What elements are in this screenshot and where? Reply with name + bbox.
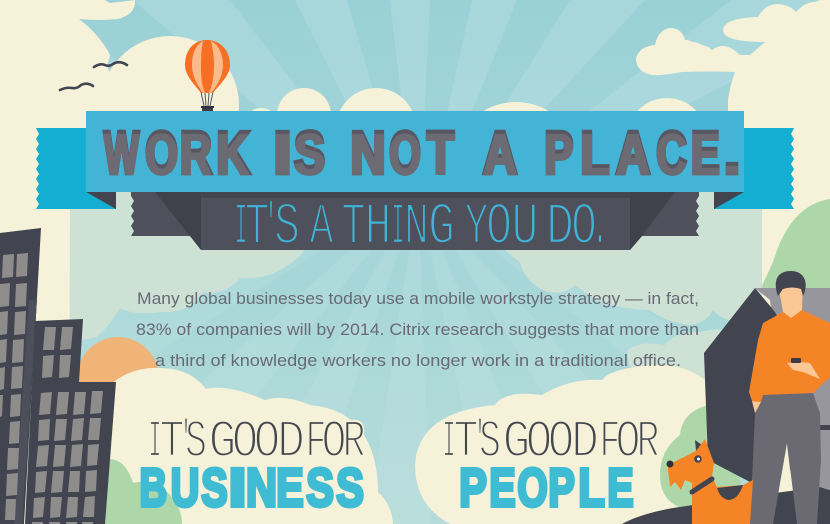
green bush left — [105, 459, 182, 524]
house — [704, 288, 830, 524]
subtitle: A — [310, 194, 334, 261]
subtitle: S — [274, 194, 300, 261]
good for people heading: G — [502, 412, 530, 472]
subtitle: O — [486, 194, 512, 261]
green bush top right — [760, 199, 830, 290]
main title: S — [294, 120, 325, 186]
cream cloud: people — [415, 365, 720, 524]
good for people heading: D — [571, 412, 599, 472]
dark sub-ribbon — [131, 192, 699, 250]
main title — [104, 120, 740, 186]
main title: W — [104, 120, 139, 186]
subtitle: O — [571, 194, 597, 261]
good for people heading: R — [636, 412, 660, 472]
hot air balloon — [185, 40, 230, 112]
pale clouds behind paragraph — [60, 180, 770, 380]
bird one — [94, 62, 127, 67]
main title: A — [483, 120, 517, 186]
main title: N — [350, 120, 386, 186]
dog — [666, 439, 753, 524]
good for business heading: S — [185, 412, 207, 472]
good for business heading: S — [306, 458, 334, 518]
good for business heading: N — [246, 458, 277, 518]
good for business heading: E — [276, 458, 304, 518]
main title: L — [580, 120, 609, 186]
good for people heading — [442, 412, 660, 518]
main title: . — [724, 120, 740, 186]
main title: T — [427, 120, 454, 186]
sun rays lower — [0, 190, 830, 524]
main title: I — [274, 120, 292, 186]
subtitle: T — [244, 194, 270, 261]
good for business heading: D — [277, 412, 305, 472]
subtitle: I — [234, 194, 248, 261]
orange sun — [77, 337, 159, 419]
subtitle: Y — [464, 194, 488, 261]
subtitle: T — [342, 194, 366, 261]
main title: C — [656, 120, 687, 186]
good for people heading: ' — [473, 412, 487, 472]
good for people heading: O — [548, 412, 574, 472]
right blue ribbon tail — [714, 128, 794, 209]
good for people heading: E — [607, 458, 634, 518]
good for business heading: O — [232, 412, 258, 472]
good for people heading: O — [517, 458, 548, 518]
good for people heading: P — [548, 458, 575, 518]
subtitle: I — [392, 194, 404, 261]
intro paragraph: 83% of companies will by 2014. Citrix research suggests that more than — [136, 320, 699, 339]
cream cloud: business — [100, 368, 393, 524]
good for people heading: F — [600, 412, 620, 472]
good for people heading: T — [454, 412, 478, 472]
subtitle: D — [546, 194, 574, 261]
subtitle: U — [512, 194, 538, 261]
main title: R — [180, 120, 212, 186]
good for business heading: T — [160, 412, 184, 472]
main title: P — [544, 120, 573, 186]
subtitle: H — [364, 194, 392, 261]
good for business heading: F — [306, 412, 326, 472]
right ribbon fold — [714, 192, 744, 209]
sun rays upper — [0, 0, 830, 245]
subtitle: G — [428, 194, 455, 261]
bird two — [60, 84, 93, 90]
good for people heading: E — [489, 458, 516, 518]
intro paragraph: a third of knowledge workers no longer work in a traditional office. — [155, 351, 681, 370]
main title: K — [216, 120, 250, 186]
good for business heading: U — [171, 458, 199, 518]
good for business heading: I — [228, 458, 246, 518]
main title: O — [145, 120, 178, 186]
good for business heading: O — [322, 412, 346, 472]
subtitle: ' — [263, 194, 279, 261]
left blue ribbon tail — [36, 128, 116, 209]
subtitle: . — [591, 194, 609, 261]
cream clouds top right — [636, 0, 830, 524]
man — [749, 271, 830, 524]
good for business heading: O — [254, 412, 280, 472]
good for business heading: B — [140, 458, 167, 518]
main title: O — [389, 120, 421, 186]
middle and right tower — [25, 319, 116, 524]
good for people heading: L — [578, 458, 605, 518]
intro paragraph: Many global businesses today use a mobile workstyle strategy — in fact, — [137, 289, 699, 308]
main title: E — [691, 120, 720, 186]
main blue ribbon — [86, 111, 744, 192]
good for business heading: ' — [179, 412, 193, 472]
left ribbon fold — [86, 192, 116, 209]
good for people heading: O — [616, 412, 640, 472]
main title: A — [616, 120, 650, 186]
good for business heading — [140, 412, 366, 518]
left tower — [0, 228, 41, 524]
subtitle — [234, 194, 609, 261]
good for business heading: I — [148, 412, 162, 472]
green bush right — [660, 405, 740, 510]
dark hill — [622, 487, 830, 524]
good for people heading: I — [442, 412, 456, 472]
good for people heading: O — [526, 412, 552, 472]
good for people heading: S — [479, 412, 501, 472]
good for people heading: P — [459, 458, 487, 518]
good for business heading: S — [201, 458, 228, 518]
good for business heading: R — [342, 412, 366, 472]
subtitle: N — [404, 194, 429, 261]
good for business heading: S — [336, 458, 364, 518]
good for business heading: G — [208, 412, 236, 472]
intro paragraph — [136, 289, 699, 370]
